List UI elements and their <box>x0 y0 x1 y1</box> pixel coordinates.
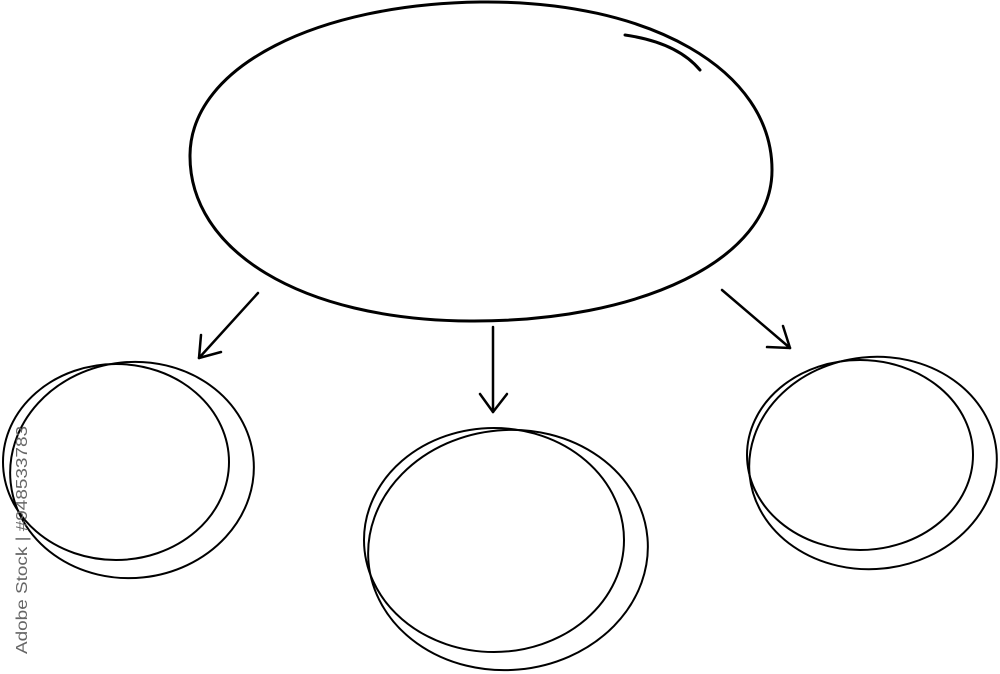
arrow: left <box>199 293 258 358</box>
middle circle <box>358 418 658 674</box>
left circle <box>0 350 265 590</box>
vertical watermark text: Adobe Stock | #948533783 <box>14 426 31 654</box>
arrow: right <box>722 290 790 348</box>
top oval <box>190 2 772 321</box>
arrow: middle <box>480 327 507 412</box>
right circle <box>739 345 1000 581</box>
